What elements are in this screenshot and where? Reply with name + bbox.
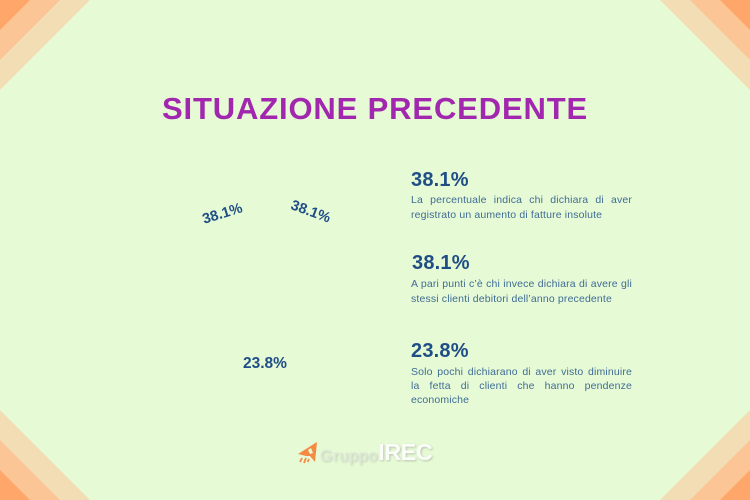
block: unpaid invoices increase	[411, 169, 632, 220]
description: economiche	[411, 394, 469, 406]
block: fewer clients with arrears	[411, 340, 632, 406]
wordmark: GruppoIREC	[320, 439, 432, 465]
logo: Gruppo IREC	[298, 439, 434, 466]
description: A pari punti c’è chi invece dichiara di avere gli	[411, 278, 632, 290]
description	[411, 194, 632, 220]
block: same debtor clients	[411, 252, 632, 304]
description: La percentuale indica chi dichiara di aver	[411, 194, 632, 206]
title: SITUAZIONE PRECEDENTE	[162, 91, 588, 126]
pie label: 23.8%: 23.8%	[243, 355, 287, 372]
description: stessi clienti debitori dell’anno precedente	[411, 292, 612, 304]
percentage: 23.8%	[411, 340, 469, 362]
icon: rocket	[298, 442, 317, 464]
percentage: 38.1%	[411, 169, 469, 191]
percentage: 38.1%	[412, 252, 470, 274]
description	[411, 366, 632, 406]
description: Solo pochi dichiarano di aver visto diminuire	[411, 366, 632, 378]
pie label: 38.1% right: 38.1%	[289, 197, 333, 227]
description: registrato un aumento di fatture insolute	[411, 208, 602, 220]
description: la fetta di clienti che hanno pendenze	[411, 380, 632, 392]
description	[411, 278, 632, 304]
pie label: 38.1% left: 38.1%	[201, 200, 245, 228]
